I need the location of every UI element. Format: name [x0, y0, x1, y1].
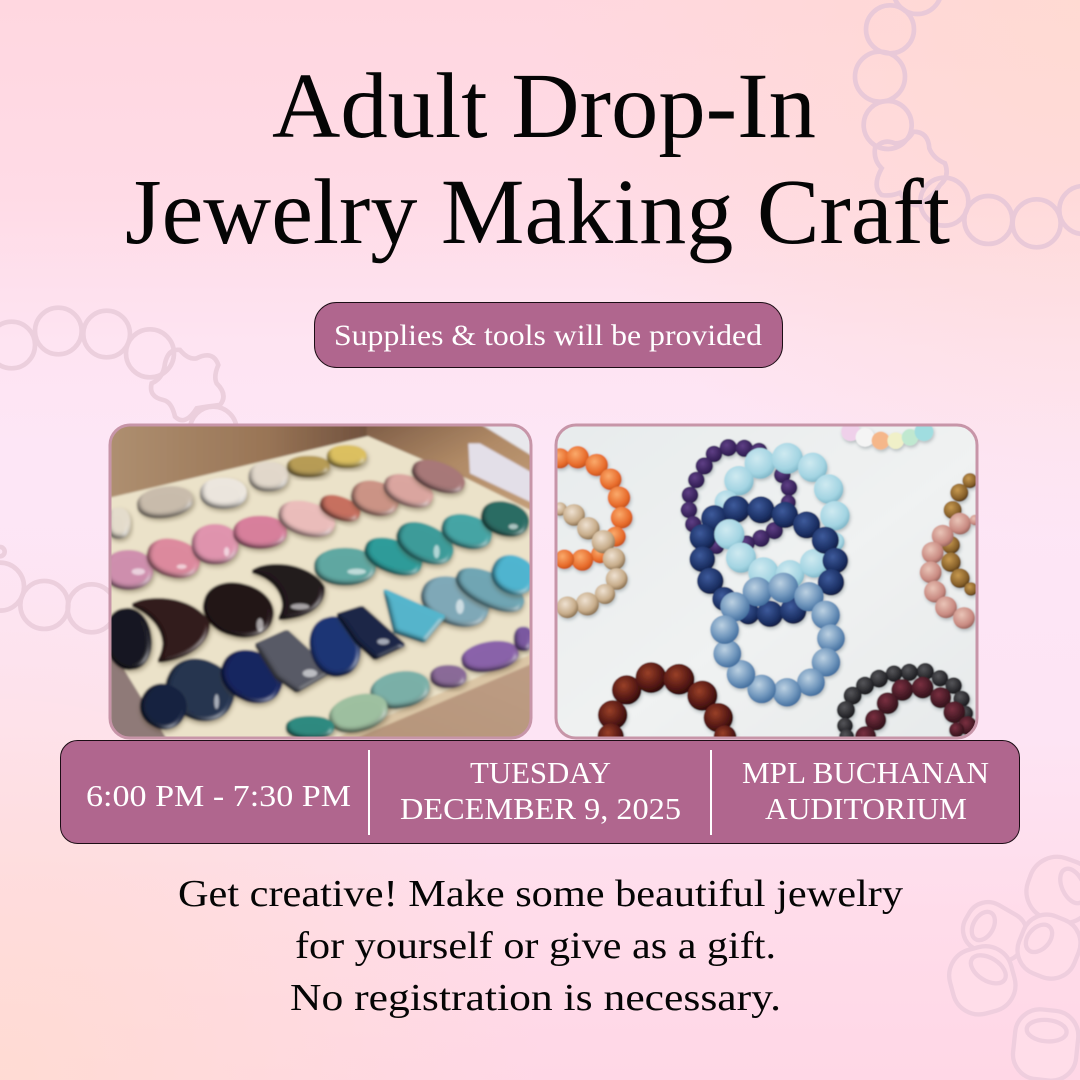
pill: supplies note	[314, 302, 782, 368]
description text: for yourself or give as a gift.	[295, 925, 776, 967]
description text: Get creative! Make some beautiful jewelry	[178, 873, 903, 915]
location: AUDITORIUM	[765, 791, 967, 826]
title: Adult Drop-In	[272, 55, 816, 158]
description text	[178, 873, 903, 1019]
location: MPL BUCHANAN	[742, 755, 989, 790]
info band: time, date, location	[60, 740, 1020, 844]
photo: gemstone bead bracelets	[545, 415, 985, 750]
decoration: left bead chain	[0, 308, 237, 632]
location	[742, 755, 989, 826]
decoration: bottom right beads	[943, 849, 1080, 1080]
date: DECEMBER 9, 2025	[400, 791, 681, 826]
title	[125, 55, 950, 264]
title: Jewelry Making Craft	[125, 161, 950, 264]
photo: gemstone pendants in a tray	[100, 415, 540, 745]
date	[400, 755, 681, 826]
pill: supplies note: Supplies & tools will be provided	[334, 319, 762, 352]
time: 6:00 PM - 7:30 PM	[86, 778, 351, 813]
date: TUESDAY	[470, 755, 611, 790]
description text: No registration is necessary.	[290, 977, 781, 1019]
decoration: top right bead chain	[855, 0, 1080, 247]
